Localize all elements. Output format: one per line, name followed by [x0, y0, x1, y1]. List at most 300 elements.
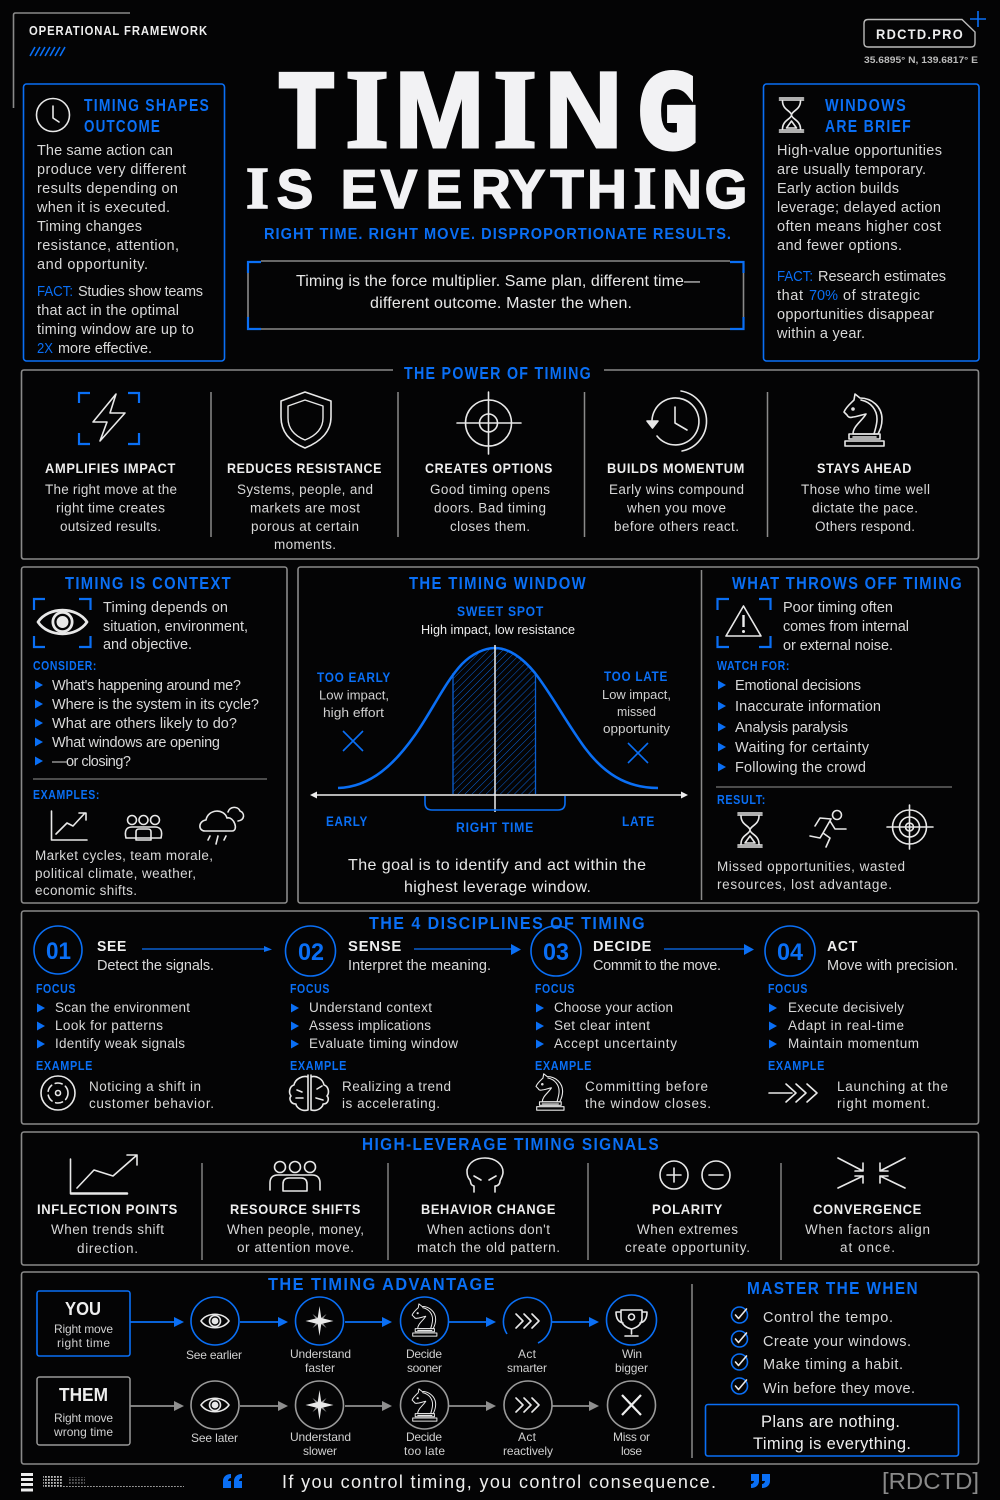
consider list: Where is the system in its cycle?	[52, 697, 259, 713]
step: act smarter	[503, 1297, 551, 1375]
card: you: Right move	[54, 1322, 113, 1336]
title: V	[381, 158, 418, 220]
section: master the when	[706, 1278, 958, 1456]
discipline 01 see	[34, 926, 272, 1111]
step: see later: See later	[191, 1431, 238, 1445]
discipline 02 sense: Understand context	[309, 1000, 432, 1015]
heading: HIGH-LEVERAGE TIMING SIGNALS	[362, 1134, 660, 1154]
column: builds momentum	[607, 391, 745, 534]
watch for list: Inaccurate information	[735, 699, 881, 715]
step: decide sooner	[400, 1297, 448, 1375]
section: what throws off timing: WHAT THROWS OFF TIMING	[732, 573, 963, 593]
fact: Studies show teams	[78, 284, 203, 300]
discipline 01 see: FOCUS	[36, 982, 76, 996]
icon: head	[467, 1158, 503, 1192]
text block: situation, environment,	[103, 619, 248, 635]
title: I	[246, 155, 269, 221]
column: stays ahead: Those who time well	[801, 482, 930, 497]
result	[717, 793, 933, 892]
title: N	[662, 158, 702, 220]
title	[246, 48, 747, 221]
wordmark: [RDCTD]	[882, 1468, 979, 1494]
discipline 03 decide: Committing before	[585, 1079, 708, 1094]
too late label: missed	[617, 704, 656, 719]
card: them: wrong time	[53, 1425, 113, 1439]
title: M	[395, 49, 484, 170]
step: win bigger: bigger	[615, 1361, 648, 1375]
column: amplifies impact	[45, 393, 177, 534]
discipline 02 sense	[286, 926, 521, 1111]
signal: convergence: at once.	[840, 1240, 895, 1255]
discipline 02 sense: Assess implications	[309, 1018, 431, 1033]
title: I	[493, 48, 537, 172]
step: decide too late: too late	[404, 1444, 445, 1458]
step: act reactively: reactively	[503, 1444, 553, 1458]
heading	[825, 95, 912, 136]
discipline 03 decide: the window closes.	[585, 1096, 711, 1111]
step: understand faster: faster	[305, 1361, 335, 1375]
discipline 02 sense: Evaluate timing window	[309, 1036, 458, 1051]
heading	[84, 95, 210, 136]
discipline 04 act: ACT	[827, 938, 858, 955]
fact: 2X	[37, 341, 53, 357]
watch for list	[717, 659, 881, 776]
header tag: operational framework: OPERATIONAL FRAMEWORK	[29, 23, 208, 38]
signal: inflection points: When trends shift	[51, 1222, 164, 1237]
consider list: —or closing?	[52, 754, 131, 770]
icon: lightning bolt in brackets	[79, 393, 139, 444]
header tag: operational framework	[14, 13, 208, 108]
card: you	[37, 1291, 130, 1356]
watch for list: Analysis paralysis	[735, 720, 848, 736]
icon: radar	[41, 1076, 75, 1110]
panel: the 4 disciplines	[22, 911, 978, 1124]
panel: the timing window and what throws off timing	[298, 567, 978, 903]
text block: the goal: highest leverage window.	[404, 879, 591, 896]
consider list: What's happening around me?	[52, 678, 241, 694]
logo badge: RDCTD.PRO	[876, 26, 964, 42]
consider list: What are others likely to do?	[52, 716, 237, 732]
discipline 01 see: Identify weak signals	[55, 1036, 185, 1051]
watch for list: Emotional decisions	[735, 678, 861, 694]
step: decide too late	[400, 1381, 448, 1458]
text block	[36, 143, 186, 273]
fact: Research estimates	[818, 269, 946, 285]
icon: warning in brackets	[718, 599, 770, 647]
footer	[21, 1468, 979, 1494]
step: see earlier	[186, 1297, 242, 1362]
text block: and objective.	[103, 637, 192, 653]
heading: TIMING SHAPES	[84, 95, 210, 115]
signal: convergence	[805, 1158, 930, 1255]
column: creates options	[425, 392, 553, 534]
watch for list: WATCH FOR:	[717, 659, 790, 673]
icon: brain	[290, 1075, 328, 1110]
discipline 02 sense: FOCUS	[290, 982, 330, 996]
sweet spot label	[421, 604, 575, 637]
column: amplifies impact: AMPLIFIES IMPACT	[45, 460, 176, 476]
discipline 01 see: SEE	[97, 938, 127, 955]
step: miss or lose	[608, 1381, 656, 1458]
column: creates options: Good timing opens	[430, 482, 550, 497]
arrows	[130, 1401, 599, 1411]
discipline 01 see: Noticing a shift in	[89, 1079, 201, 1094]
discipline 04 act: Launching at the	[837, 1079, 948, 1094]
step: decide sooner: Decide	[406, 1347, 442, 1361]
title: I	[345, 48, 389, 172]
column: stays ahead: STAYS AHEAD	[817, 460, 912, 476]
fact: more effective.	[58, 341, 152, 357]
too late label	[602, 669, 671, 763]
callout: force multiplier: different outcome. Master the when.	[370, 295, 632, 312]
discipline 03 decide: DECIDE	[593, 938, 652, 955]
discipline 03 decide: Choose your action	[554, 1000, 673, 1015]
result: RESULT:	[717, 793, 766, 807]
fact: FACT:	[777, 269, 813, 285]
column: amplifies impact: The right move at the	[45, 482, 177, 497]
fact: opportunities disappear	[777, 307, 934, 323]
discipline 04 act: right moment.	[837, 1096, 930, 1111]
callout: plans are nothing: Plans are nothing.	[761, 1413, 900, 1431]
too early label: Low impact,	[319, 688, 389, 702]
fact: that	[777, 288, 803, 304]
logo badge: 35.6895° N, 139.6817° E	[864, 55, 978, 66]
card: them: Right move	[54, 1411, 113, 1425]
title: R	[471, 158, 511, 220]
bell curve chart: LATE	[622, 814, 655, 829]
step: win bigger	[606, 1295, 656, 1375]
heading: TIMING IS CONTEXT	[65, 573, 232, 593]
text block: are usually temporary.	[777, 162, 926, 178]
callout: force multiplier	[248, 261, 744, 329]
bell curve chart: RIGHT TIME	[456, 820, 534, 835]
text block: the goal: The goal is to identify and act within the	[348, 857, 646, 874]
step: understand slower: slower	[303, 1444, 337, 1458]
column: stays ahead: dictate the pace.	[812, 500, 918, 516]
examples: EXAMPLES:	[33, 788, 100, 802]
consider list: CONSIDER:	[33, 659, 97, 673]
card: you: right time	[57, 1336, 110, 1350]
icon: people	[270, 1162, 320, 1191]
fact: that act in the optimal	[37, 303, 179, 319]
signal: resource shifts: When people, money,	[227, 1222, 364, 1237]
too late label: opportunity	[603, 721, 671, 736]
section: what throws off timing	[716, 573, 963, 892]
text block: results depending on	[37, 181, 178, 197]
title: T	[550, 158, 584, 220]
icon: fast arrows	[769, 1084, 817, 1102]
watch for list: Following the crowd	[735, 760, 866, 776]
discipline 03 decide: Commit to the move.	[593, 958, 721, 974]
discipline 01 see: Look for patterns	[55, 1018, 163, 1033]
icon: converging arrows	[838, 1158, 905, 1188]
icon: hourglass	[738, 813, 762, 847]
signal: inflection points: INFLECTION POINTS	[37, 1201, 178, 1217]
text block: Timing depends on	[103, 600, 228, 616]
panel: the power of timing	[22, 363, 978, 559]
title: H	[587, 158, 627, 220]
signal: polarity: When extremes	[637, 1222, 738, 1237]
heading: THE 4 DISCIPLINES OF TIMING	[369, 913, 646, 933]
discipline 03 decide: 03	[543, 939, 569, 966]
step: act smarter: smarter	[507, 1361, 547, 1375]
icon: clock with return arrow	[647, 391, 707, 451]
step: see earlier: See earlier	[186, 1348, 242, 1362]
card: you: YOU	[65, 1299, 101, 1319]
signal: behavior change: BEHAVIOR CHANGE	[421, 1201, 556, 1217]
discipline 01 see: 01	[46, 938, 71, 965]
heading: THE TIMING WINDOW	[409, 573, 587, 593]
column: reduces resistance: markets are most	[250, 500, 360, 516]
callout: plans are nothing: Timing is everything.	[753, 1435, 911, 1453]
step: see later	[191, 1381, 239, 1445]
text block: comes from internal	[783, 619, 909, 635]
panel: timing is context	[22, 567, 287, 903]
column: creates options: CREATES OPTIONS	[425, 460, 553, 476]
signal: inflection points: direction.	[77, 1241, 138, 1256]
fact: 70%	[809, 288, 838, 304]
title: N	[544, 49, 622, 170]
fact	[776, 269, 946, 342]
signal: polarity: create opportunity.	[625, 1240, 750, 1255]
discipline 03 decide: Set clear intent	[554, 1018, 650, 1033]
consider list: What windows are opening	[52, 735, 220, 751]
sweet spot label: SWEET SPOT	[457, 604, 544, 619]
discipline 04 act: Maintain momentum	[788, 1036, 919, 1051]
heading: THE POWER OF TIMING	[404, 363, 592, 383]
text block	[103, 600, 248, 653]
text block: leverage; delayed action	[777, 200, 941, 216]
discipline 03 decide: FOCUS	[535, 982, 575, 996]
step: decide sooner: sooner	[407, 1361, 442, 1375]
column: builds momentum: BUILDS MOMENTUM	[607, 460, 745, 476]
signal: behavior change: When actions don't	[427, 1222, 550, 1237]
step: understand faster: Understand	[290, 1347, 351, 1361]
signal: behavior change: match the old pattern.	[417, 1240, 560, 1255]
step: miss or lose: lose	[621, 1444, 642, 1458]
heading: ARE BRIEF	[825, 116, 912, 136]
discipline 04 act	[765, 926, 958, 1111]
discipline 04 act: Adapt in real-time	[788, 1018, 904, 1033]
sweet spot label: High impact, low resistance	[421, 622, 575, 637]
text block	[783, 600, 909, 654]
text block: High-value opportunities	[777, 143, 942, 159]
text block: the goal	[348, 857, 646, 896]
column: builds momentum: Early wins compound	[609, 482, 744, 497]
bell curve chart	[310, 645, 688, 835]
result: Missed opportunities, wasted	[717, 859, 905, 874]
title: E	[341, 158, 377, 220]
discipline 02 sense: SENSE	[348, 938, 402, 955]
step: decide too late: Decide	[406, 1430, 442, 1444]
checklist: Make timing a habit.	[763, 1357, 903, 1373]
quote mark open	[223, 1474, 242, 1488]
icon: clock	[36, 98, 70, 132]
examples	[33, 788, 244, 898]
fact: timing window are up to	[37, 322, 194, 338]
too late label: Low impact,	[602, 687, 671, 702]
watch for list: Waiting for certainty	[735, 740, 870, 756]
column: amplifies impact: right time creates	[56, 500, 165, 516]
text block: resistance, attention,	[37, 238, 179, 254]
text block: Poor timing often	[783, 600, 893, 616]
column: reduces resistance: Systems, people, and	[237, 482, 373, 497]
panel: windows are brief	[764, 84, 979, 361]
icon: trophy	[616, 1310, 647, 1336]
fact: FACT:	[37, 284, 73, 300]
discipline 02 sense: 02	[298, 939, 324, 966]
icon: market chart	[52, 811, 87, 840]
fact: of strategic	[843, 288, 920, 304]
title: G	[705, 158, 747, 220]
examples: Market cycles, team morale,	[35, 848, 213, 863]
column: builds momentum: when you move	[626, 500, 726, 516]
decorative bars and dots	[21, 1474, 184, 1490]
column: creates options: closes them.	[450, 519, 530, 534]
text block: produce very different	[37, 162, 186, 178]
text block: often means higher cost	[777, 219, 941, 235]
column: reduces resistance	[227, 392, 382, 552]
callout: force multiplier: Timing is the force multiplier. Same plan, different time—	[296, 273, 700, 290]
icon: target	[887, 805, 933, 849]
icon: eye in brackets	[34, 599, 90, 647]
icon: runner	[810, 810, 846, 847]
too early label: high effort	[323, 705, 384, 720]
closing quote text: If you control timing, you control consequence.	[282, 1472, 716, 1492]
panel: timing shapes outcome	[24, 84, 224, 361]
signal: inflection points	[37, 1155, 178, 1256]
checklist: Win before they move.	[763, 1381, 915, 1397]
icon: storm cloud	[200, 807, 244, 844]
icon: hourglass	[780, 98, 804, 132]
discipline 04 act: Execute decisively	[788, 1000, 904, 1015]
arrows	[130, 1317, 599, 1327]
title: Y	[509, 158, 545, 220]
row: them	[37, 1377, 656, 1458]
discipline 01 see: Detect the signals.	[97, 958, 214, 974]
title: S	[277, 158, 313, 220]
checklist	[732, 1307, 915, 1397]
column: reduces resistance: porous at certain	[251, 519, 359, 534]
title: T	[276, 54, 337, 171]
too late label: TOO LATE	[604, 669, 668, 684]
icon: team	[125, 816, 162, 840]
bell curve chart: EARLY	[326, 814, 368, 829]
discipline 01 see: customer behavior.	[89, 1096, 214, 1111]
callout: plans are nothing	[706, 1404, 958, 1456]
step: act smarter: Act	[518, 1347, 537, 1361]
text block	[777, 143, 942, 254]
step: act reactively	[503, 1381, 553, 1458]
discipline 04 act: Move with precision.	[827, 958, 958, 974]
discipline 02 sense: Interpret the meaning.	[348, 958, 491, 974]
result: resources, lost advantage.	[717, 877, 892, 892]
column: reduces resistance: REDUCES RESISTANCE	[227, 460, 382, 476]
text block: and fewer options.	[777, 238, 902, 254]
too early label	[317, 670, 391, 751]
text block: Early action builds	[777, 181, 899, 197]
subtitle: RIGHT TIME. RIGHT MOVE. DISPROPORTIONATE RESULTS.	[264, 226, 732, 243]
step: act reactively: Act	[518, 1430, 537, 1444]
column: amplifies impact: outsized results.	[60, 519, 161, 534]
fact: within a year.	[776, 326, 865, 342]
signal: resource shifts	[227, 1162, 364, 1255]
signal: polarity: POLARITY	[652, 1201, 723, 1217]
heading: OUTCOME	[84, 116, 161, 136]
signal: convergence: When factors align	[805, 1222, 930, 1237]
signal: behavior change	[417, 1158, 560, 1255]
discipline 04 act: EXAMPLE	[768, 1059, 825, 1073]
column: creates options: doors. Bad timing	[434, 500, 546, 516]
discipline 04 act: FOCUS	[768, 982, 808, 996]
examples: political climate, weather,	[35, 866, 196, 881]
discipline 01 see: Scan the environment	[55, 1000, 190, 1015]
card: them: THEM	[59, 1385, 108, 1405]
row: you	[37, 1291, 656, 1375]
discipline 02 sense: is accelerating.	[342, 1096, 440, 1111]
signal: convergence: CONVERGENCE	[813, 1201, 922, 1217]
discipline 02 sense: Realizing a trend	[342, 1079, 451, 1094]
icon: chess knight	[536, 1074, 564, 1110]
column: builds momentum: before others react.	[614, 519, 739, 534]
panel: high-leverage timing signals	[22, 1132, 978, 1265]
signal: resource shifts: RESOURCE SHIFTS	[230, 1201, 361, 1217]
column: stays ahead	[801, 394, 930, 534]
too early label: TOO EARLY	[317, 670, 391, 685]
discipline 04 act: 04	[777, 939, 804, 966]
logo badge	[864, 11, 986, 66]
consider list	[33, 659, 259, 770]
title: I	[634, 155, 656, 221]
step: miss or lose: Miss or	[613, 1430, 650, 1444]
card: them	[37, 1377, 130, 1445]
section: master the when: MASTER THE WHEN	[747, 1278, 919, 1298]
heading: WINDOWS	[825, 95, 907, 115]
checklist: Control the tempo.	[763, 1310, 893, 1326]
panel: the timing advantage	[22, 1272, 978, 1464]
step: understand slower: Understand	[290, 1430, 351, 1444]
column: reduces resistance: moments.	[274, 537, 336, 552]
title: E	[426, 158, 462, 220]
column: stays ahead: Others respond.	[815, 519, 915, 534]
fact	[37, 284, 203, 357]
checklist: Create your windows.	[763, 1334, 911, 1350]
text block: and opportunity.	[37, 257, 148, 273]
title: G	[637, 54, 698, 171]
examples: economic shifts.	[35, 883, 137, 898]
icon: crosshair	[457, 392, 521, 454]
text block: Timing changes	[37, 219, 142, 235]
text block: or external noise.	[783, 638, 893, 654]
discipline 03 decide: EXAMPLE	[535, 1059, 592, 1073]
heading: THE TIMING ADVANTAGE	[268, 1274, 496, 1294]
text block: The same action can	[37, 143, 173, 159]
step: win bigger: Win	[622, 1347, 642, 1361]
icon: inflection chart	[70, 1155, 137, 1194]
discipline 03 decide: Accept uncertainty	[554, 1036, 677, 1051]
icon: plus minus	[660, 1161, 730, 1189]
signal: polarity	[625, 1161, 750, 1255]
discipline 01 see: EXAMPLE	[36, 1059, 93, 1073]
step: understand slower	[290, 1381, 351, 1458]
discipline 02 sense: EXAMPLE	[290, 1059, 347, 1073]
signal: resource shifts: or attention move.	[237, 1240, 354, 1255]
step: understand faster	[290, 1297, 351, 1375]
discipline 03 decide	[531, 926, 754, 1111]
quote mark close	[751, 1474, 770, 1488]
text block: when it is executed.	[36, 200, 170, 216]
icon: chess knight	[844, 394, 884, 446]
